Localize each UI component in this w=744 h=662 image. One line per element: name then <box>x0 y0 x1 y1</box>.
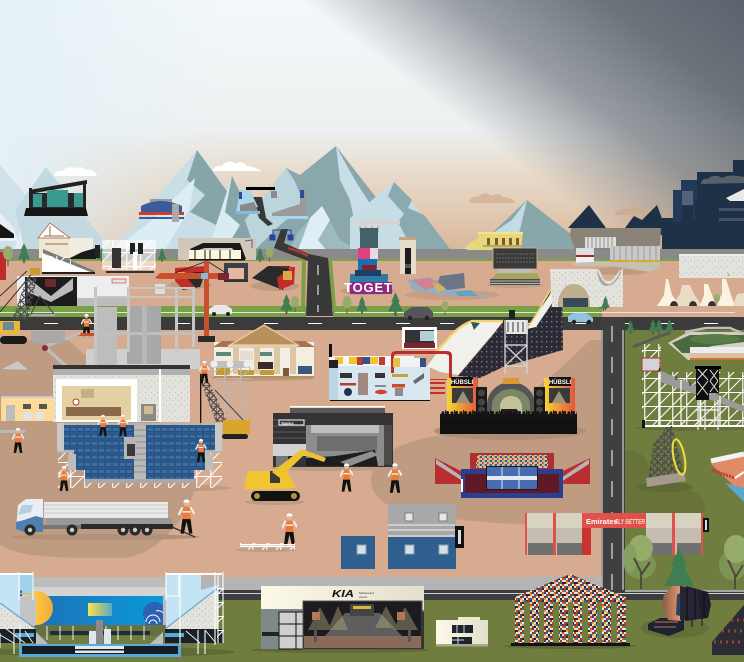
crowd pyramid bottom right <box>712 605 744 655</box>
yellow excavator arm over building <box>272 449 326 478</box>
red arch <box>391 351 477 393</box>
red and blue padel stage <box>435 453 590 498</box>
worker pulling pallet <box>172 499 195 537</box>
white tents <box>657 279 744 306</box>
yellow excavator <box>245 468 305 505</box>
toget tower installation <box>341 218 400 295</box>
left edge stage structures <box>0 213 18 280</box>
yellow arcade building <box>467 232 523 250</box>
white ramp scaffold <box>42 249 95 274</box>
pool deck with white fence <box>711 454 744 502</box>
kia showroom: KIA <box>332 589 354 600</box>
ring lattice tower <box>637 426 693 492</box>
mountain ski platforms <box>236 187 308 219</box>
concrete blocks near excavator <box>2 331 65 370</box>
grey modern museum <box>570 228 661 275</box>
trees row upper <box>3 243 674 334</box>
stage: top left concert <box>22 180 90 219</box>
truck with scaffold load <box>10 499 200 540</box>
small stage in centre <box>224 263 248 282</box>
kia showroom: Mastercard <box>359 591 374 595</box>
ground strip and sand <box>0 249 744 662</box>
car white <box>209 305 232 316</box>
dark scoreboard with stand <box>487 248 543 288</box>
green verges and road top <box>0 261 735 317</box>
black exhibition building <box>271 406 395 471</box>
white scaffold grandstand right <box>635 344 744 431</box>
green park area right <box>625 330 744 590</box>
dark city skyline <box>662 160 744 250</box>
kia showroom: Arena <box>359 595 367 599</box>
grandstand seating <box>48 415 232 492</box>
red grandstand left <box>168 266 212 290</box>
concert stage <box>434 377 586 440</box>
excavator top left <box>0 321 27 344</box>
scaffold parts on ground <box>236 543 296 552</box>
small stand on mountain <box>139 199 184 222</box>
bottom road and pavement <box>0 577 744 662</box>
sand shadow left <box>0 340 196 558</box>
white wall building: 1 <box>727 272 730 277</box>
ski jump ramp lattice <box>427 288 563 378</box>
clouds <box>54 162 656 215</box>
bottom left blue stage <box>0 572 235 657</box>
emirates pavilions and banner: Emirates <box>586 517 618 526</box>
trees in park <box>623 535 744 594</box>
yellow portable building <box>1 396 54 421</box>
red grandstand right <box>251 266 299 291</box>
museum building <box>211 325 315 381</box>
small white billboard <box>402 327 437 349</box>
road: right vertical road <box>601 317 625 591</box>
concert stage: HÜBSLI <box>451 379 473 386</box>
stone portal <box>399 237 417 274</box>
road: mountain access road <box>252 197 333 316</box>
containers <box>341 504 464 569</box>
black and cream pavilion <box>178 238 256 260</box>
tower crane <box>155 261 229 342</box>
concert stage: HÜBSLI <box>549 379 571 386</box>
crawler crane <box>199 361 250 446</box>
right stadium <box>633 328 744 360</box>
kia showroom <box>250 586 430 653</box>
gondola pylon <box>270 230 293 240</box>
road: horizontal main road <box>0 317 744 330</box>
white hall building behind seating <box>53 365 190 422</box>
mountains <box>0 146 668 250</box>
sponsor wall with flags <box>329 344 430 401</box>
white wall building <box>679 254 744 278</box>
worker carrying beam left <box>0 428 25 453</box>
lattice crane left <box>0 268 55 320</box>
small white building <box>436 617 488 646</box>
worker on road lift <box>42 314 96 366</box>
white truss pavilion <box>102 240 156 273</box>
emirates pavilions and banner <box>525 513 709 555</box>
toget tower installation: TOGET <box>344 280 392 295</box>
climbing rock <box>405 273 499 300</box>
sky <box>0 0 744 260</box>
billboard white with black panel <box>17 276 129 306</box>
emirates pavilions and banner: FLY BETTER <box>615 517 645 526</box>
scaffold tower with floodlights <box>210 360 251 420</box>
small black stage behind house <box>70 238 100 259</box>
mosaic temple <box>504 574 636 649</box>
workers near excavator <box>282 463 402 546</box>
wooden pod installation <box>641 586 711 638</box>
black exhibition building: Swiss <box>281 421 294 426</box>
cars <box>404 307 593 324</box>
timber frame house <box>38 223 70 258</box>
white speckled arch building <box>550 269 623 310</box>
sand shadow right <box>371 340 601 527</box>
concrete towers under construction <box>86 287 200 369</box>
